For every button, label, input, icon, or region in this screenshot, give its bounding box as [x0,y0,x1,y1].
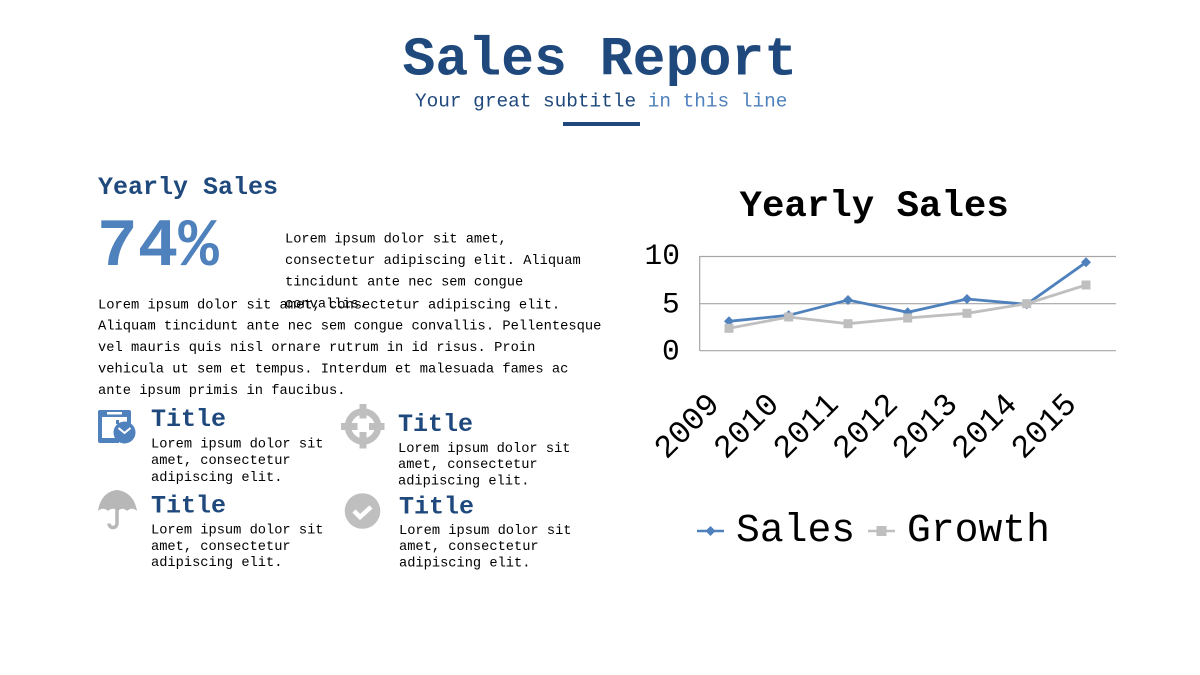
stat description text: tincidunt ante nec sem congue [285,276,523,290]
legend: Sales [736,508,855,553]
icon: crosshair target [341,404,384,448]
item text: adipiscing elit. [398,474,529,490]
chart title: Yearly Sales [740,186,1009,228]
item text [151,524,324,571]
item text: Lorem ipsum dolor sit [399,524,572,539]
feature item 4 [345,492,572,572]
stat description text: convallis. [285,298,367,312]
left heading: Yearly Sales: Yearly Sales [98,173,278,202]
item title: Title [398,410,473,439]
body paragraph: vehicula ut sem et tempus. Interdum et malesuada fames ac [98,362,568,378]
item text: amet, consectetur [151,454,291,469]
x axis year labels: 2011 [766,387,847,467]
item text: Lorem ipsum dolor sit [151,524,324,538]
x axis year labels: 2014 [945,387,1025,467]
big stat: 74%: 74% [97,210,219,286]
title underline [563,122,640,126]
item text [399,524,572,572]
body paragraph: ante ipsum primis in faucibus. [98,383,346,399]
item text: adipiscing elit. [151,556,282,571]
y axis labels: 0 [662,334,680,368]
item text: Lorem ipsum dolor sit [151,438,324,452]
x axis year labels: 2010 [707,387,787,467]
legend [697,508,1050,553]
item text: amet, consectetur [398,458,538,473]
stat description text [285,232,581,312]
series: Growth [724,280,1090,333]
body paragraph [98,298,601,399]
series: Sales [724,257,1091,326]
x axis year labels: 2012 [826,387,906,467]
feature item 1 [98,405,324,486]
item title: Title [399,492,474,522]
y axis labels [644,239,680,368]
body paragraph: Lorem ipsum dolor sit amet, consectetur adipiscing elit. [98,298,560,314]
item text: Lorem ipsum dolor sit [398,442,570,457]
stat description text: consectetur adipiscing elit. Aliquam [285,254,581,269]
item text: amet, consectetur [151,540,291,555]
item text: amet, consectetur [399,540,539,555]
body paragraph: Aliquam tincidunt ante nec sem congue convallis. Pellentesque [98,318,601,334]
x axis year labels: 2009 [647,387,728,467]
x axis year labels [647,387,1085,467]
item text [398,442,570,490]
x axis year labels: 2015 [1004,387,1085,467]
title: Sales Report [402,30,797,92]
x axis year labels: 2013 [885,387,966,467]
item text [151,438,324,486]
item title: Title [151,492,226,520]
icon: umbrella [98,490,137,528]
gridlines and axes [700,256,1116,351]
y axis labels: 5 [662,288,680,322]
item text: adipiscing elit. [399,556,530,572]
subtitle: Your great subtitle in this line [415,90,787,112]
stat description text: Lorem ipsum dolor sit amet, [285,232,507,248]
item text: adipiscing elit. [151,471,282,486]
line chart: Yearly Sales [644,186,1116,553]
y axis labels: 10 [644,239,680,273]
icon: check circle [345,493,380,529]
body paragraph: vel mauris quis nisl ornare rutrum in id risus. Proin [98,340,535,356]
feature item 2 [341,404,570,490]
item title: Title [151,405,226,434]
legend: Growth [907,508,1050,553]
feature item 3 [98,490,324,571]
icon: calendar clock [98,410,136,444]
